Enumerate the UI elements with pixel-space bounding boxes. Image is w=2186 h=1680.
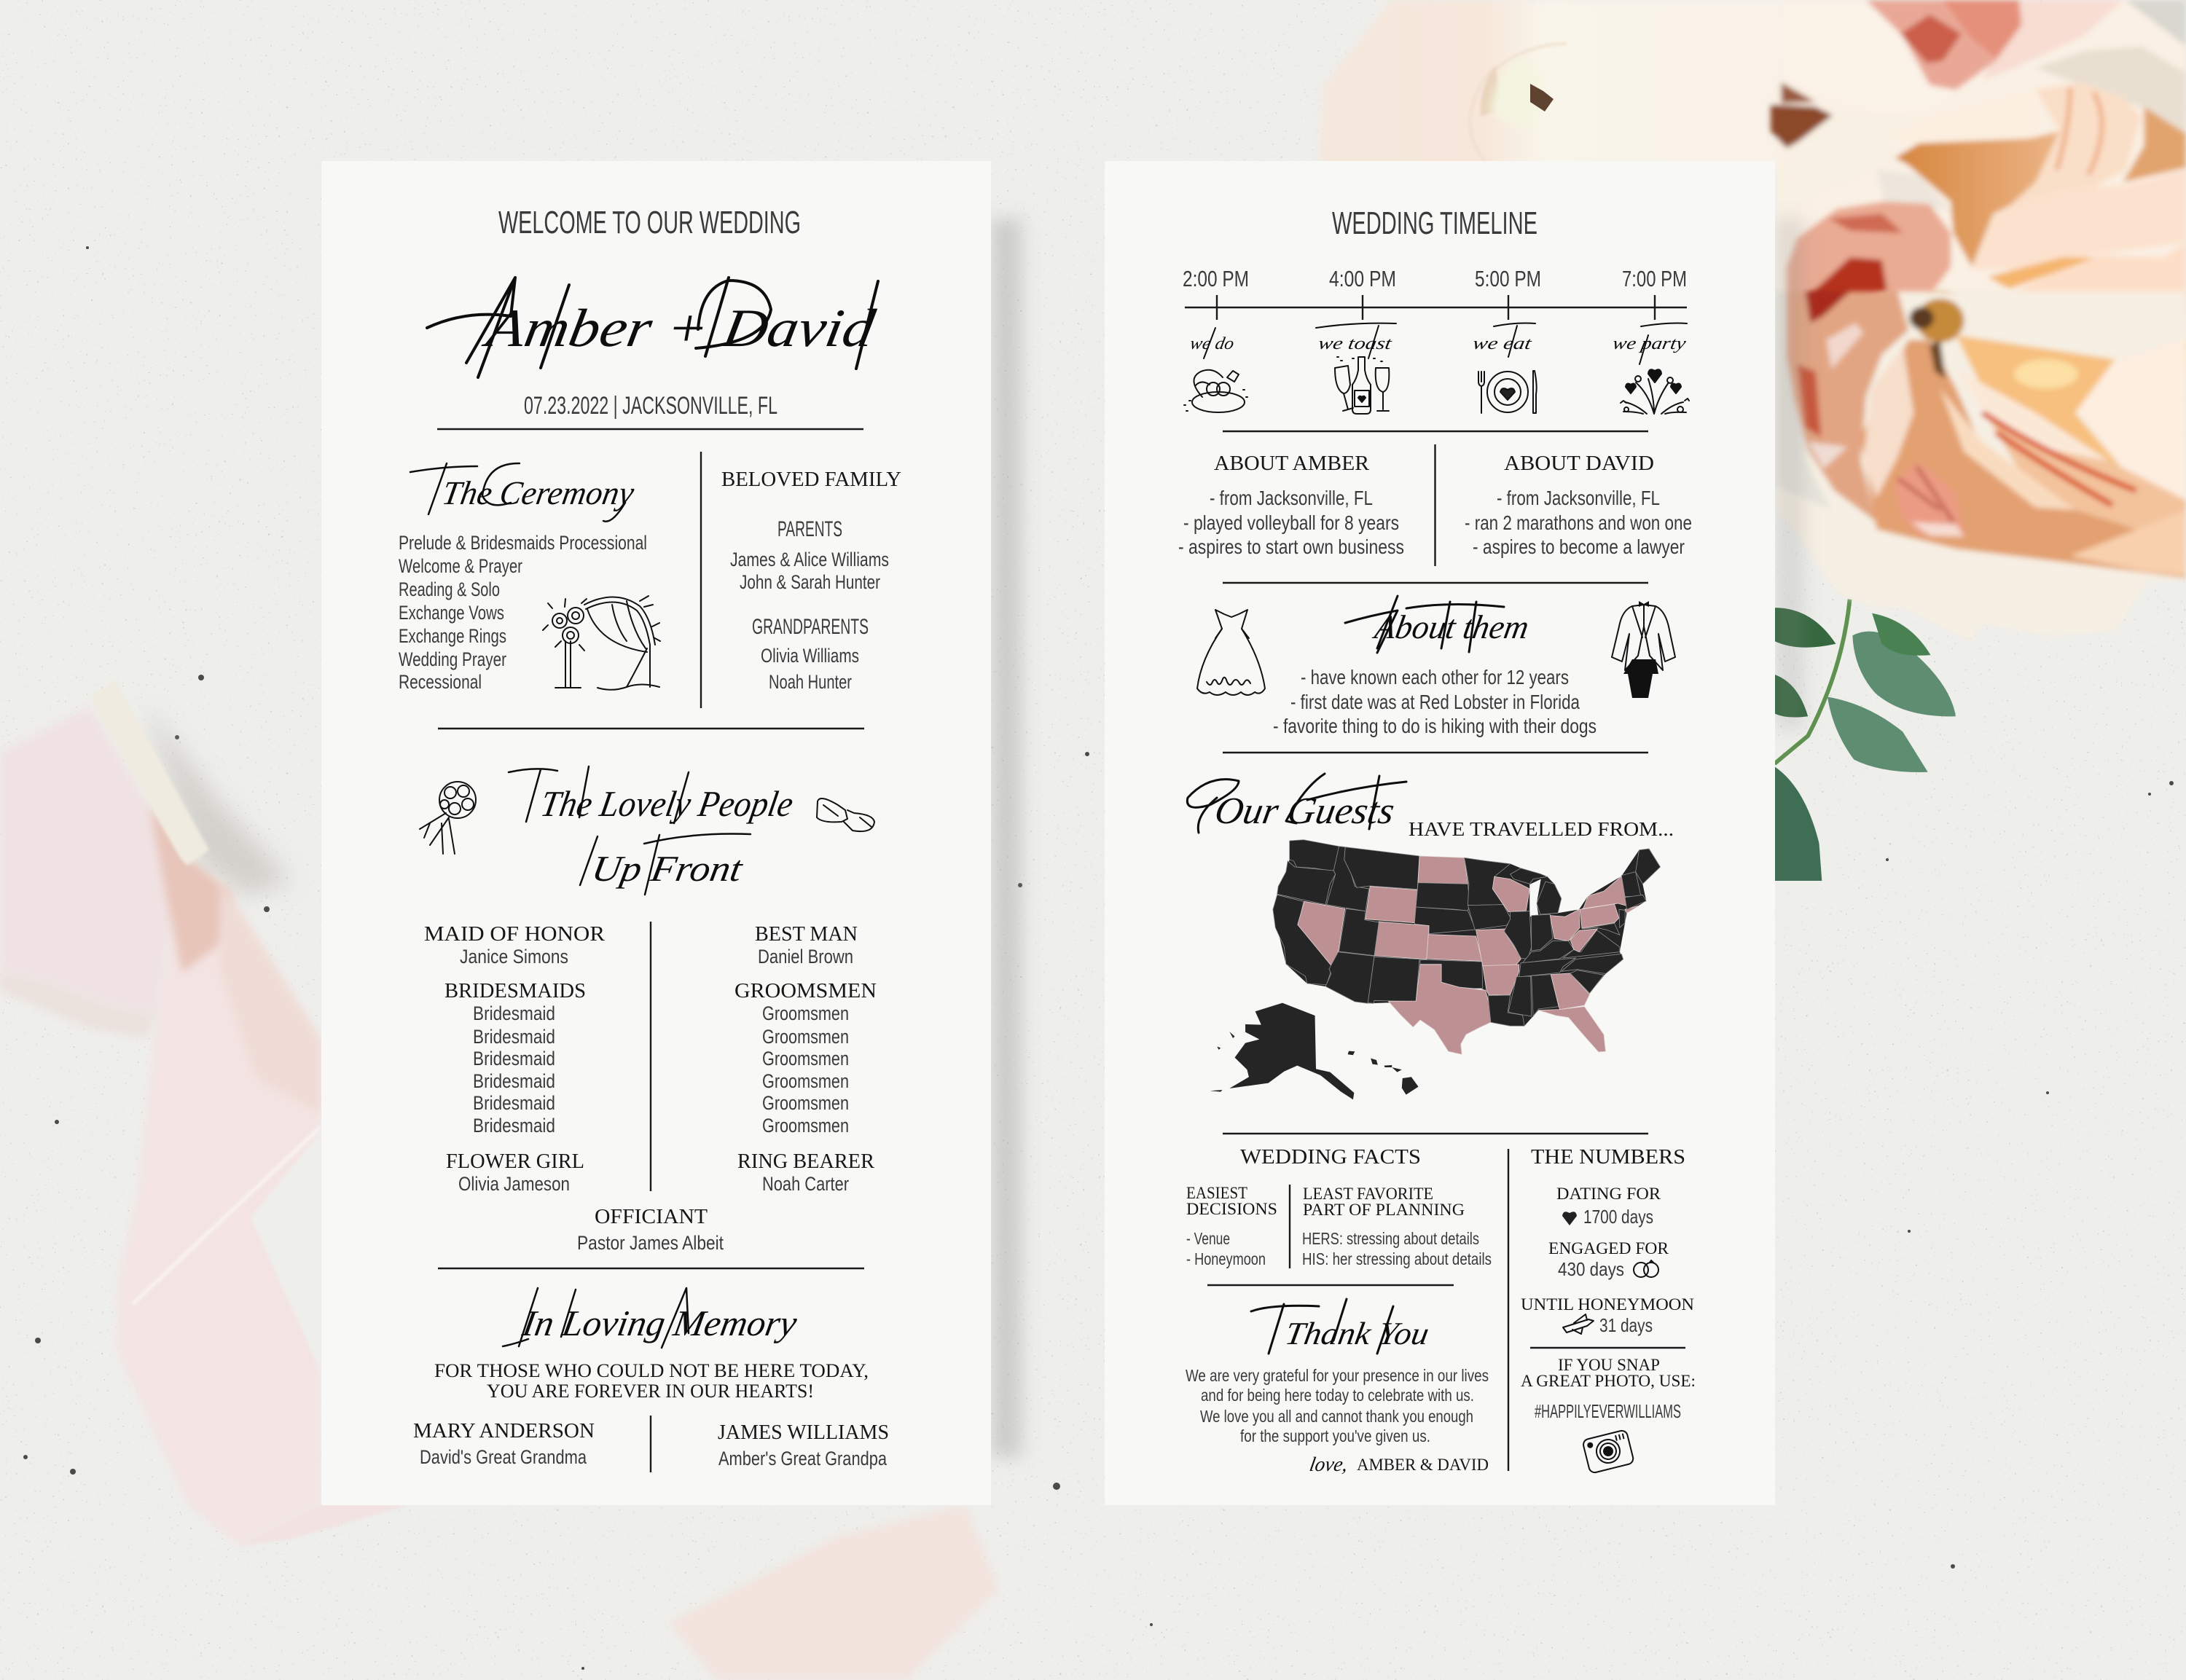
text: memorial message: YOU ARE FOREVER IN OUR HEARTS! xyxy=(487,1381,814,1402)
icon: champagne xyxy=(1335,357,1389,414)
stat: dating for: 1700 days xyxy=(1583,1206,1653,1228)
heading: our guests: Our Guests xyxy=(1212,790,1398,832)
text: officiant xyxy=(577,1206,724,1254)
text: memorial message xyxy=(434,1360,869,1402)
icon: ring box xyxy=(1184,370,1247,412)
text: photo hashtag prompt: IF YOU SNAP xyxy=(1558,1356,1660,1374)
text: flower girl: FLOWER GIRL xyxy=(446,1150,584,1173)
label: we eat xyxy=(1471,323,1535,357)
ribbon: blush silk spool and band xyxy=(0,680,998,1680)
text: groomsmen xyxy=(734,980,877,1137)
title: couple names in script: Amber + David xyxy=(478,299,880,358)
stat: until honeymoon: 31 days xyxy=(1599,1314,1653,1336)
text: ceremony order: Reading & Solo xyxy=(399,578,500,600)
flower: white ranunculus xyxy=(1319,0,1785,168)
heading: welcome: WELCOME TO OUR WEDDING xyxy=(498,205,801,240)
text: officiant: Pastor James Albeit xyxy=(577,1232,724,1254)
text: groomsmen: Groomsmen xyxy=(762,1115,849,1137)
chart: map of United States xyxy=(1210,840,1661,1099)
text: least favorite part of planning: PART OF PLANNING xyxy=(1303,1201,1465,1219)
text: about them facts: - favorite thing to do is hiking with their dogs xyxy=(1273,715,1597,737)
text: least favorite part of planning: HERS: stressing about details xyxy=(1302,1229,1479,1248)
text: ceremony order: Exchange Vows xyxy=(399,602,504,624)
stat: until honeymoon: UNTIL HONEYMOON xyxy=(1521,1295,1694,1314)
heading: the lovely people up front: The Lovely People xyxy=(538,783,796,824)
label: we eat: we eat xyxy=(1471,334,1534,353)
text: about david: - ran 2 marathons and won one xyxy=(1465,511,1692,534)
text: ceremony order: Exchange Rings xyxy=(399,625,506,647)
text: easiest decisions: DECISIONS xyxy=(1186,1200,1277,1218)
text: easiest decisions: EASIEST xyxy=(1186,1184,1247,1202)
text: parents: PARENTS xyxy=(777,517,842,541)
heading: wedding facts: WEDDING FACTS xyxy=(1240,1146,1421,1169)
text: groomsmen: GROOMSMEN xyxy=(734,980,877,1002)
heading: in loving memory xyxy=(503,1288,801,1348)
heading: the lovely people up front: Up Front xyxy=(589,848,746,889)
text: have travelled from: HAVE TRAVELLED FROM... xyxy=(1409,818,1674,840)
icon: camera xyxy=(1582,1429,1634,1474)
text: bridesmaids: Bridesmaid xyxy=(473,1002,555,1024)
text: bridesmaids: Bridesmaid xyxy=(473,1048,555,1069)
text: groomsmen: Groomsmen xyxy=(762,1070,849,1092)
text: about them facts xyxy=(1273,666,1597,737)
panel: right timeline card xyxy=(1105,161,1775,1505)
label: we toast: we toast xyxy=(1317,334,1394,353)
text: maid of honor: MAID OF HONOR xyxy=(424,923,605,946)
text: flower girl: Olivia Jameson xyxy=(458,1173,570,1195)
heading: wedding timeline: WEDDING TIMELINE xyxy=(1332,205,1537,241)
text: maid of honor: Janice Simons xyxy=(460,946,568,967)
text: flower girl xyxy=(446,1150,584,1195)
icon: floral arch xyxy=(543,596,660,690)
text: ring bearer xyxy=(737,1150,874,1195)
heading: the ceremony: The Ceremony xyxy=(439,475,637,512)
icon: wedding dress xyxy=(1197,610,1265,695)
text: easiest decisions: - Honeymoon xyxy=(1186,1249,1266,1268)
text: signature: love, xyxy=(1308,1453,1349,1476)
text: easiest decisions xyxy=(1186,1184,1277,1268)
text: bridesmaids: BRIDESMAIDS xyxy=(444,980,586,1002)
label: we toast xyxy=(1316,323,1396,358)
text: thank you message: and for being here today to celebrate with us. xyxy=(1201,1386,1474,1405)
icon: wedding rings xyxy=(1634,1260,1658,1277)
text: mary anderson: MARY ANDERSON xyxy=(413,1420,595,1442)
text: ring bearer: Noah Carter xyxy=(762,1173,849,1195)
text: thank you message xyxy=(1186,1366,1489,1445)
stat: until honeymoon xyxy=(1521,1295,1694,1336)
text: signature: AMBER & DAVID xyxy=(1357,1456,1489,1474)
text: james williams: JAMES WILLIAMS xyxy=(718,1421,889,1444)
text: thank you message: We are very grateful for your presence in our lives xyxy=(1186,1366,1489,1385)
text: groomsmen: Groomsmen xyxy=(762,1002,849,1024)
text: bridesmaids: Bridesmaid xyxy=(473,1115,555,1137)
chart: timeline axis: 5:00 PM xyxy=(1475,266,1541,291)
text: mary anderson xyxy=(413,1420,595,1468)
text: groomsmen: Groomsmen xyxy=(762,1048,849,1069)
text: bridesmaids: Bridesmaid xyxy=(473,1070,555,1092)
heading: the lovely people up front xyxy=(509,766,796,895)
heading: about them: About them xyxy=(1370,609,1532,646)
text: about amber: ABOUT AMBER xyxy=(1214,452,1369,475)
stat: dating for xyxy=(1556,1185,1661,1228)
stat: dating for: DATING FOR xyxy=(1556,1185,1661,1203)
heading: beloved family: BELOVED FAMILY xyxy=(721,468,901,491)
text: grandparents: Noah Hunter xyxy=(769,671,852,693)
text: parents: John & Sarah Hunter xyxy=(740,571,880,593)
chart: timeline axis: 7:00 PM xyxy=(1622,266,1687,291)
text: about david xyxy=(1465,452,1692,558)
flower: salmon rose and peach peony (upper) xyxy=(1771,0,2186,379)
text: parents: James & Alice Williams xyxy=(730,549,889,570)
text: james williams xyxy=(718,1421,889,1469)
icon: tuxedo xyxy=(1612,601,1675,698)
text: about david: - aspires to become a lawyer xyxy=(1473,535,1685,558)
text: ceremony order xyxy=(399,532,647,693)
text: thank you message: for the support you've given us. xyxy=(1240,1426,1430,1445)
text: about amber: - aspires to start own business xyxy=(1178,535,1404,558)
text: ceremony order: Welcome & Prayer xyxy=(399,555,522,577)
heading: thank you xyxy=(1251,1299,1432,1354)
text: date and location: 07.23.2022 | JACKSONVILLE, FL xyxy=(524,392,777,420)
heading: the ceremony xyxy=(410,463,637,522)
text: least favorite part of planning: LEAST FAVORITE xyxy=(1303,1185,1433,1203)
text: maid of honor xyxy=(424,923,605,967)
text: ceremony order: Prelude & Bridesmaids Processional xyxy=(399,532,647,554)
text: memorial message: FOR THOSE WHO COULD NOT BE HERE TODAY, xyxy=(434,1360,869,1381)
title: couple names in script xyxy=(427,278,880,377)
text: best man xyxy=(755,923,858,967)
text: thank you message: We love you all and cannot thank you enough xyxy=(1200,1407,1473,1426)
text: ceremony order: Wedding Prayer xyxy=(399,648,506,670)
chart: timeline axis xyxy=(1183,266,1687,320)
text: best man: BEST MAN xyxy=(755,923,858,946)
heading: in loving memory: In Loving Memory xyxy=(519,1303,801,1343)
text: grandparents: GRANDPARENTS xyxy=(752,615,869,639)
text: groomsmen: Groomsmen xyxy=(762,1026,849,1048)
text: about amber: - played volleyball for 8 years xyxy=(1183,511,1399,534)
icon: airplane xyxy=(1563,1314,1594,1334)
text: james williams: Amber's Great Grandpa xyxy=(718,1448,888,1469)
heading: the numbers: THE NUMBERS xyxy=(1531,1146,1685,1169)
text: bridesmaids: Bridesmaid xyxy=(473,1026,555,1048)
icon: heart xyxy=(1562,1212,1577,1225)
text: easiest decisions: - Venue xyxy=(1186,1229,1230,1248)
text: least favorite part of planning: HIS: her stressing about details xyxy=(1302,1249,1492,1268)
text: about amber: - from Jacksonville, FL xyxy=(1210,487,1373,509)
text: about david: ABOUT DAVID xyxy=(1504,452,1654,475)
text: photo hashtag prompt: A GREAT PHOTO, USE: xyxy=(1521,1372,1696,1390)
label: we do: we do xyxy=(1188,334,1236,353)
stat: engaged for: ENGAGED FOR xyxy=(1548,1239,1669,1257)
panel: left program card xyxy=(321,161,991,1505)
heading: about them xyxy=(1345,596,1532,653)
chart: timeline axis: 4:00 PM xyxy=(1329,266,1396,291)
icon: plate with heart xyxy=(1478,371,1537,413)
label: we party xyxy=(1611,323,1688,364)
text: mary anderson: David's Great Grandma xyxy=(420,1446,587,1468)
chart: timeline axis: 2:00 PM xyxy=(1183,266,1249,291)
icon: bow tie xyxy=(817,798,874,831)
text: grandparents: Olivia Williams xyxy=(761,645,859,667)
stat: engaged for: 430 days xyxy=(1558,1258,1624,1280)
text: ceremony order: Recessional xyxy=(399,671,482,693)
text: about david: - from Jacksonville, FL xyxy=(1497,487,1660,509)
text: grandparents xyxy=(752,615,869,693)
label: we do xyxy=(1188,328,1236,358)
heading: our guests xyxy=(1187,774,1406,833)
text: signature xyxy=(1308,1453,1489,1476)
text: about them facts: - have known each other for 12 years xyxy=(1301,666,1569,688)
text: about amber xyxy=(1178,452,1404,558)
text: photo hashtag prompt xyxy=(1521,1356,1696,1422)
text: bridesmaids xyxy=(444,980,586,1137)
icon: bouquet xyxy=(420,782,476,854)
text: ring bearer: RING BEARER xyxy=(737,1150,874,1173)
text: about them facts: - first date was at Red Lobster in Florida xyxy=(1290,691,1580,713)
text: least favorite part of planning xyxy=(1302,1185,1492,1268)
text: bridesmaids: Bridesmaid xyxy=(473,1092,555,1114)
foliage: green leaves and stem xyxy=(1774,600,1956,881)
label: we party: we party xyxy=(1611,334,1688,353)
text: photo hashtag prompt: #HAPPILYEVERWILLIAMS xyxy=(1535,1400,1681,1422)
text: parents xyxy=(730,517,889,593)
icon: fireworks with hearts xyxy=(1621,369,1689,414)
text: officiant: OFFICIANT xyxy=(595,1206,708,1228)
stat: engaged for xyxy=(1548,1239,1669,1280)
text: groomsmen: Groomsmen xyxy=(762,1092,849,1114)
card shadows xyxy=(991,219,1804,1457)
flower: peach peony (lower) xyxy=(1771,291,2186,641)
text: best man: Daniel Brown xyxy=(758,946,853,967)
heading: thank you: Thank You xyxy=(1282,1315,1432,1351)
